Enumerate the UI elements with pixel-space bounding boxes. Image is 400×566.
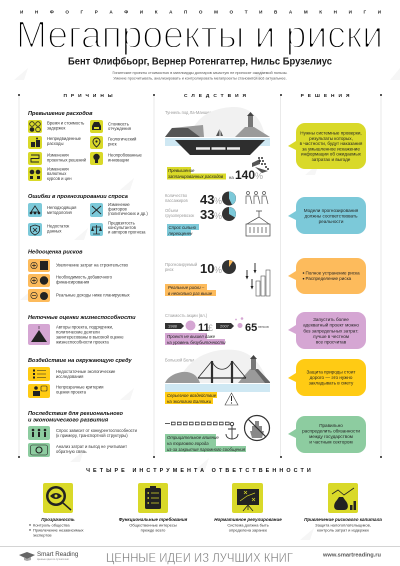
icon: people bbox=[28, 426, 50, 440]
panel: demand forecast errors: Предвзятость bbox=[108, 220, 136, 226]
highlight: port trade bbox=[165, 434, 246, 452]
icon: strategy board bbox=[232, 483, 263, 513]
highlight: cost overrun bbox=[167, 167, 226, 180]
icon: money pile bbox=[252, 157, 269, 173]
callout: risk: Распределение риска bbox=[306, 276, 352, 281]
icon: construction costs up bbox=[28, 259, 50, 272]
stat: freight bbox=[165, 207, 236, 222]
highlight: port trade: на торговлю города bbox=[167, 441, 209, 446]
panel: underestimated risks: Реальные доходы ниже планируемых bbox=[56, 292, 131, 298]
callout: adequate project: адекватный проект можно bbox=[303, 322, 359, 328]
heading: Последствия для регионального bbox=[28, 411, 123, 417]
tool: risk capital: Защита налогоплательщиков, bbox=[315, 522, 371, 528]
callout: reviews: за умышленное искажение bbox=[302, 146, 360, 151]
icon: expropriation cost bbox=[90, 120, 103, 133]
illustration: Great Belt bridge: Большой Бельт bbox=[165, 358, 194, 362]
callout: reviews: затратах и выгоде bbox=[312, 157, 351, 162]
stat: passengers bbox=[165, 192, 236, 207]
panel: environmental impact: Непрозрачные критерии bbox=[56, 384, 104, 390]
stat: freight: грузоперевозок bbox=[165, 213, 194, 218]
icon: checklist bbox=[28, 367, 50, 381]
panel: demand forecast errors: и авторов прогноза bbox=[108, 230, 146, 234]
callout: models: Модели прогнозирования bbox=[304, 208, 359, 213]
stat: forecasted risk bbox=[165, 260, 236, 276]
tool: functional requirements: Функциональные требования bbox=[119, 516, 188, 522]
stat: share price bbox=[165, 313, 269, 334]
panel: cost overruns causes: Геологический bbox=[108, 136, 137, 142]
tool: regulation: Нормативное регулирование bbox=[214, 517, 282, 522]
panel: regional development bbox=[28, 411, 138, 457]
stat: passengers: пассажиров bbox=[165, 198, 188, 203]
callout: adequate project: без запредельных затрат: bbox=[303, 328, 359, 333]
panel: cost overruns causes: Непредвиденные bbox=[47, 136, 82, 141]
callout: models: должны соответствовать bbox=[304, 214, 358, 218]
icon: lower revenue bbox=[28, 289, 50, 302]
callout: adequate project: лучше в честном bbox=[313, 334, 349, 339]
icon: money bag and growth bbox=[328, 483, 358, 513]
icon: money cycle bbox=[28, 443, 50, 457]
icon: lack of data bbox=[28, 223, 42, 236]
stat: passengers: % bbox=[214, 196, 222, 206]
callout: models: реальности bbox=[319, 219, 344, 224]
panel: regional development: обратную связь bbox=[56, 449, 87, 454]
panel: regional development: Анализ затрат и выгод не учитывает bbox=[56, 444, 127, 449]
highlight: port trade: из-за закрытия паромного сообщения bbox=[167, 447, 246, 452]
stat: 140 percent bbox=[229, 168, 263, 182]
panel: cost overruns causes: курсов и цен bbox=[47, 176, 72, 181]
callout: adequate project bbox=[288, 312, 366, 349]
callout: nature protection: закладывать в смету bbox=[309, 380, 354, 386]
icon: evaluator bbox=[28, 384, 50, 398]
highlight: port trade: Отрицательное влияние bbox=[167, 435, 219, 440]
website: www.smartreading.ru bbox=[322, 552, 381, 558]
callout: nature protection: дорого — это нужно bbox=[310, 375, 353, 380]
panel: underestimated risks: финансирования bbox=[56, 280, 89, 284]
column heading: effects: СЛЕДСТВИЯ bbox=[184, 93, 250, 99]
authors: Бент Флифбьорг, Вернер Ротенгаттер, Нильс Брузелиус bbox=[68, 56, 332, 68]
highlight: cost overrun: запланированных расходов bbox=[167, 174, 224, 179]
highlight: environmental impact: Серьезное воздействие bbox=[167, 393, 217, 398]
stat: 140 percent: на bbox=[229, 175, 234, 180]
callout: risk: Полное устранение риска bbox=[306, 270, 360, 276]
icon: currency and price changes bbox=[28, 167, 42, 181]
stat: share price: 11 bbox=[198, 322, 210, 334]
panel: environmental impact bbox=[28, 357, 133, 398]
illustration: Great Belt bridge bbox=[165, 350, 270, 392]
illustration: Channel Tunnel bbox=[165, 107, 270, 155]
heading: Ошибки в прогнозировании спроса bbox=[28, 193, 128, 200]
callout: nature protection: Защита природы стоит bbox=[306, 370, 356, 374]
callout: duties: и частным сектором bbox=[309, 440, 353, 444]
panel: cost overruns causes: инновации bbox=[108, 158, 130, 162]
callout: reviews: информации об ожидаемых bbox=[301, 152, 362, 157]
tool: risk capital bbox=[304, 483, 382, 532]
panel: demand forecast errors: факторов bbox=[108, 206, 128, 212]
column heading: solutions: РЕШЕНИЯ bbox=[301, 93, 353, 99]
icon: inadequate methodology bbox=[28, 203, 42, 217]
callout: reviews: в частности, будут наказания bbox=[300, 141, 363, 146]
callout: reviews: результаты которых, bbox=[309, 136, 353, 141]
stat: 140 percent: % bbox=[255, 171, 263, 181]
panel: cost overruns causes: валютных bbox=[47, 171, 67, 176]
panel: inaccurate viability: заинтересованы в высокой оценке bbox=[56, 334, 124, 340]
icon: consultant bias bbox=[90, 223, 103, 236]
stat: share price: 1988 bbox=[168, 324, 178, 328]
panel: underestimated risks: Увеличение затрат на строительство bbox=[56, 262, 129, 268]
icon: anchor bbox=[226, 422, 238, 439]
stat: share price: 65 bbox=[245, 322, 257, 334]
callout: adequate project: Запустить более bbox=[313, 317, 349, 322]
panel: cost overruns causes: отчуждения bbox=[108, 126, 131, 131]
highlight: demand overestimated: Спрос сильно bbox=[168, 225, 197, 230]
highlight: real risks: Реальные риски – bbox=[168, 285, 205, 290]
panel: demand forecast errors: Изменение bbox=[108, 202, 130, 207]
heading: Недооценка рисков bbox=[28, 250, 83, 256]
panel: cost overruns causes: риск bbox=[108, 142, 117, 146]
stat: freight: Объем bbox=[165, 208, 178, 213]
intro text: Гигантские проекты стоимостью в миллиарды долларов зачастую не приносят ожидаемой пользы. bbox=[112, 71, 288, 75]
icon: factor changes bbox=[90, 203, 103, 217]
panel: demand forecast errors: (политических и др.) bbox=[108, 211, 148, 216]
logo: Smart Reading bbox=[19, 551, 79, 561]
stat: forecasted risk: риск bbox=[165, 267, 174, 272]
stat: share price: пенсов bbox=[258, 325, 269, 329]
icon: mountain bbox=[28, 324, 50, 345]
panel: cost overruns causes: Время и стоимость bbox=[47, 120, 85, 126]
icon: no ships bbox=[244, 416, 270, 440]
panel: cost overruns causes: расходы bbox=[47, 141, 64, 146]
panel: demand forecast errors bbox=[28, 193, 148, 236]
stat: share price: Стоимость акции (вл.) bbox=[165, 313, 208, 318]
panel: demand forecast errors: данных bbox=[47, 228, 62, 234]
panel: environmental impact: исследования bbox=[56, 374, 83, 379]
highlight: demand overestimated bbox=[167, 224, 199, 236]
panel: cost overruns causes: Изменения bbox=[47, 166, 69, 172]
stat: 140 percent: 140 bbox=[235, 168, 255, 182]
stat: forecasted risk: % bbox=[214, 265, 222, 275]
icon: untested technology bbox=[90, 152, 103, 165]
highlight: below break-even: Проект не вышел даже bbox=[167, 334, 216, 339]
icon: rising bars and falling euros bbox=[246, 263, 270, 296]
panel: cost overruns causes: Изменения bbox=[47, 152, 69, 158]
tool: regulation bbox=[214, 483, 282, 532]
icon: design changes bbox=[28, 152, 42, 165]
panel: inaccurate viability: Авторы проекта, подрядчики, bbox=[56, 324, 113, 330]
callout: nature protection bbox=[288, 359, 366, 396]
panel: regional development: Спрос зависит от конкурентоспособности bbox=[56, 428, 138, 433]
panel: regional development: (к примеру, транспортной структуры) bbox=[56, 433, 128, 438]
header kicker: И Н Ф О Г Р А Ф И К А П О М О Т И В А М К Н И Г И bbox=[20, 10, 381, 14]
intro text: Умение просчитывать, анализировать и контролировать мегапроекты становится всё актуальнее. bbox=[113, 76, 287, 80]
tool: functional requirements bbox=[119, 483, 188, 532]
panel: inaccurate viability bbox=[28, 314, 136, 345]
icon: chain bbox=[165, 422, 231, 424]
heading: Воздействие на окружающую среду bbox=[28, 357, 133, 364]
icon: passengers bbox=[246, 192, 268, 204]
tool: functional requirements: Общественные интересы bbox=[129, 522, 177, 528]
callout: duties bbox=[288, 416, 366, 453]
panel: cost overruns causes bbox=[28, 111, 142, 181]
tool: regulation: Система должна быть bbox=[227, 522, 269, 528]
callout: reviews: Нужны системные проверки, bbox=[300, 130, 362, 136]
column heading: causes: ПРИЧИНЫ bbox=[63, 93, 117, 99]
callout: risk bbox=[288, 258, 366, 294]
title: Мегапроекты и риски bbox=[16, 14, 383, 56]
panel: demand forecast errors: методология bbox=[47, 210, 72, 215]
panel: environmental impact: оценки проекта bbox=[56, 390, 87, 394]
panel: underestimated risks bbox=[28, 250, 131, 302]
highlight: environmental impact bbox=[165, 392, 217, 404]
panel: demand forecast errors: консультантов bbox=[108, 225, 137, 230]
icon: extra financing bbox=[28, 274, 50, 287]
highlight: below break-even bbox=[165, 333, 226, 345]
icon: container on crane bbox=[246, 211, 270, 236]
heading: Неточные оценки жизнеспособности bbox=[28, 314, 136, 321]
panel: cost overruns causes: Стоимость bbox=[108, 122, 130, 126]
icon: unforeseen costs bbox=[28, 136, 42, 149]
tool: transparency bbox=[29, 483, 84, 538]
callout: reviews bbox=[288, 123, 366, 169]
tool: regulation: определена заранее bbox=[229, 528, 268, 532]
callout: duties: между государством bbox=[309, 434, 353, 439]
tool: transparency: экспертов bbox=[33, 532, 52, 538]
icon: magnifier eye bbox=[43, 483, 73, 513]
illustration: Channel Tunnel: Туннель под Ла-Маншем bbox=[165, 110, 212, 115]
callout: duties: Правильно bbox=[319, 423, 343, 428]
stat: share price: 2007 bbox=[220, 324, 230, 328]
panel: cost overruns causes: Неопробованные bbox=[108, 152, 142, 158]
slogan: ЦЕННЫЕ ИДЕИ ИЗ ЛУЧШИХ КНИГ bbox=[106, 550, 293, 565]
callout: duties: распределить обязанности bbox=[302, 428, 360, 434]
stat: forecasted risk: Прогнозируемый bbox=[165, 262, 197, 267]
stat: freight: 33 bbox=[200, 207, 214, 222]
tool: risk capital: Привлечение рискового капитала bbox=[304, 517, 382, 522]
icon: clipboard bbox=[138, 483, 168, 513]
logo: Smart Reading: Smart Reading bbox=[37, 551, 79, 558]
icon: geology risk bbox=[90, 136, 103, 149]
tool: transparency: Прозрачность bbox=[41, 517, 75, 522]
icon: time and cost bbox=[28, 120, 42, 133]
stat: freight: % bbox=[214, 211, 222, 221]
panel: environmental impact: Недостаточные экологические bbox=[56, 369, 116, 374]
panel: regional development: и экономического развития bbox=[28, 418, 109, 424]
panel: underestimated risks: Необходимость добавочного bbox=[56, 274, 113, 280]
tool: risk capital: контроль затрат и издержек bbox=[317, 528, 369, 532]
icon: warning triangle bbox=[225, 393, 238, 405]
stat: passengers: Количество bbox=[165, 193, 188, 198]
section heading: four tools: ЧЕТЫРЕ ИНСТРУМЕНТА ОТВЕТСТВЕННОСТИ bbox=[86, 468, 314, 474]
panel: demand forecast errors: Неподходящая bbox=[47, 205, 76, 210]
highlight: cost overrun: Превышение bbox=[168, 168, 195, 173]
panel: cost overruns causes: проектных решений bbox=[47, 158, 87, 162]
panel: demand forecast errors: Недостаток bbox=[47, 224, 69, 228]
tool: transparency: Привлечение независимых bbox=[33, 528, 84, 532]
logo: Smart Reading: Ценные идеи из лучших книг bbox=[37, 558, 69, 561]
highlight: real risks: в несколько раз выше bbox=[168, 291, 213, 296]
tool: transparency: Контроль общества bbox=[33, 522, 70, 528]
intro text bbox=[112, 71, 288, 80]
highlight: below break-even: на уровень безубыточности bbox=[167, 340, 226, 345]
heading: Превышение расходов bbox=[28, 111, 93, 117]
highlight: demand overestimated: переоценен bbox=[168, 231, 193, 236]
highlight: real risks bbox=[165, 284, 216, 296]
stat: forecasted risk: 10 bbox=[200, 261, 214, 276]
panel: inaccurate viability: политические деятели bbox=[56, 330, 100, 334]
stat: passengers: 43 bbox=[200, 192, 214, 207]
stat: share price: £ bbox=[208, 323, 213, 333]
tool: functional requirements: прежде всего bbox=[141, 528, 166, 532]
panel: inaccurate viability: жизнеспособности проекта bbox=[56, 340, 109, 344]
highlight: environmental impact: на экологию Балтики bbox=[167, 399, 212, 404]
callout: models bbox=[288, 197, 366, 234]
callout: adequate project: все просчитав bbox=[316, 340, 347, 344]
panel: cost overruns causes: задержек bbox=[47, 126, 65, 130]
